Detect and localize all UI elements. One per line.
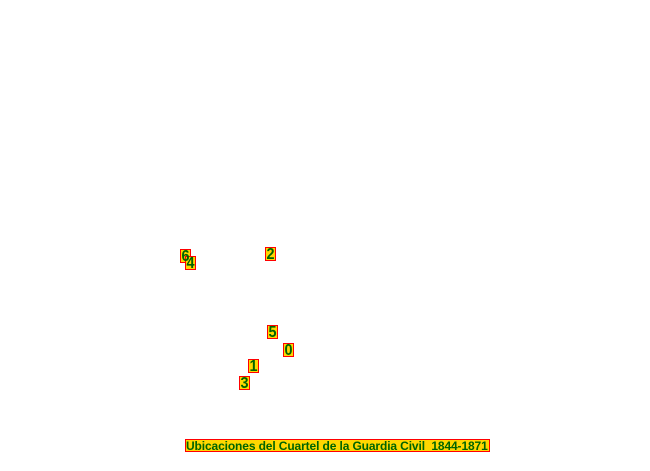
marker 2: 2 — [266, 246, 275, 263]
marker 5: 5 — [268, 324, 277, 341]
marker 3: 3 — [240, 375, 249, 392]
marker 6: 6 — [181, 248, 190, 265]
marker 4 — [185, 256, 196, 270]
marker 3 — [239, 376, 250, 390]
marker 0 — [283, 343, 294, 357]
marker 2 — [265, 247, 276, 261]
marker 4: 4 — [186, 255, 195, 272]
marker 6 — [180, 249, 191, 263]
marker 5 — [267, 325, 278, 339]
marker 1: 1 — [249, 358, 258, 375]
title: Ubicaciones del Cuartel de la Guardia Civil 1844-1871 — [186, 439, 488, 453]
marker 0: 0 — [284, 342, 293, 359]
marker 1 — [248, 359, 259, 373]
